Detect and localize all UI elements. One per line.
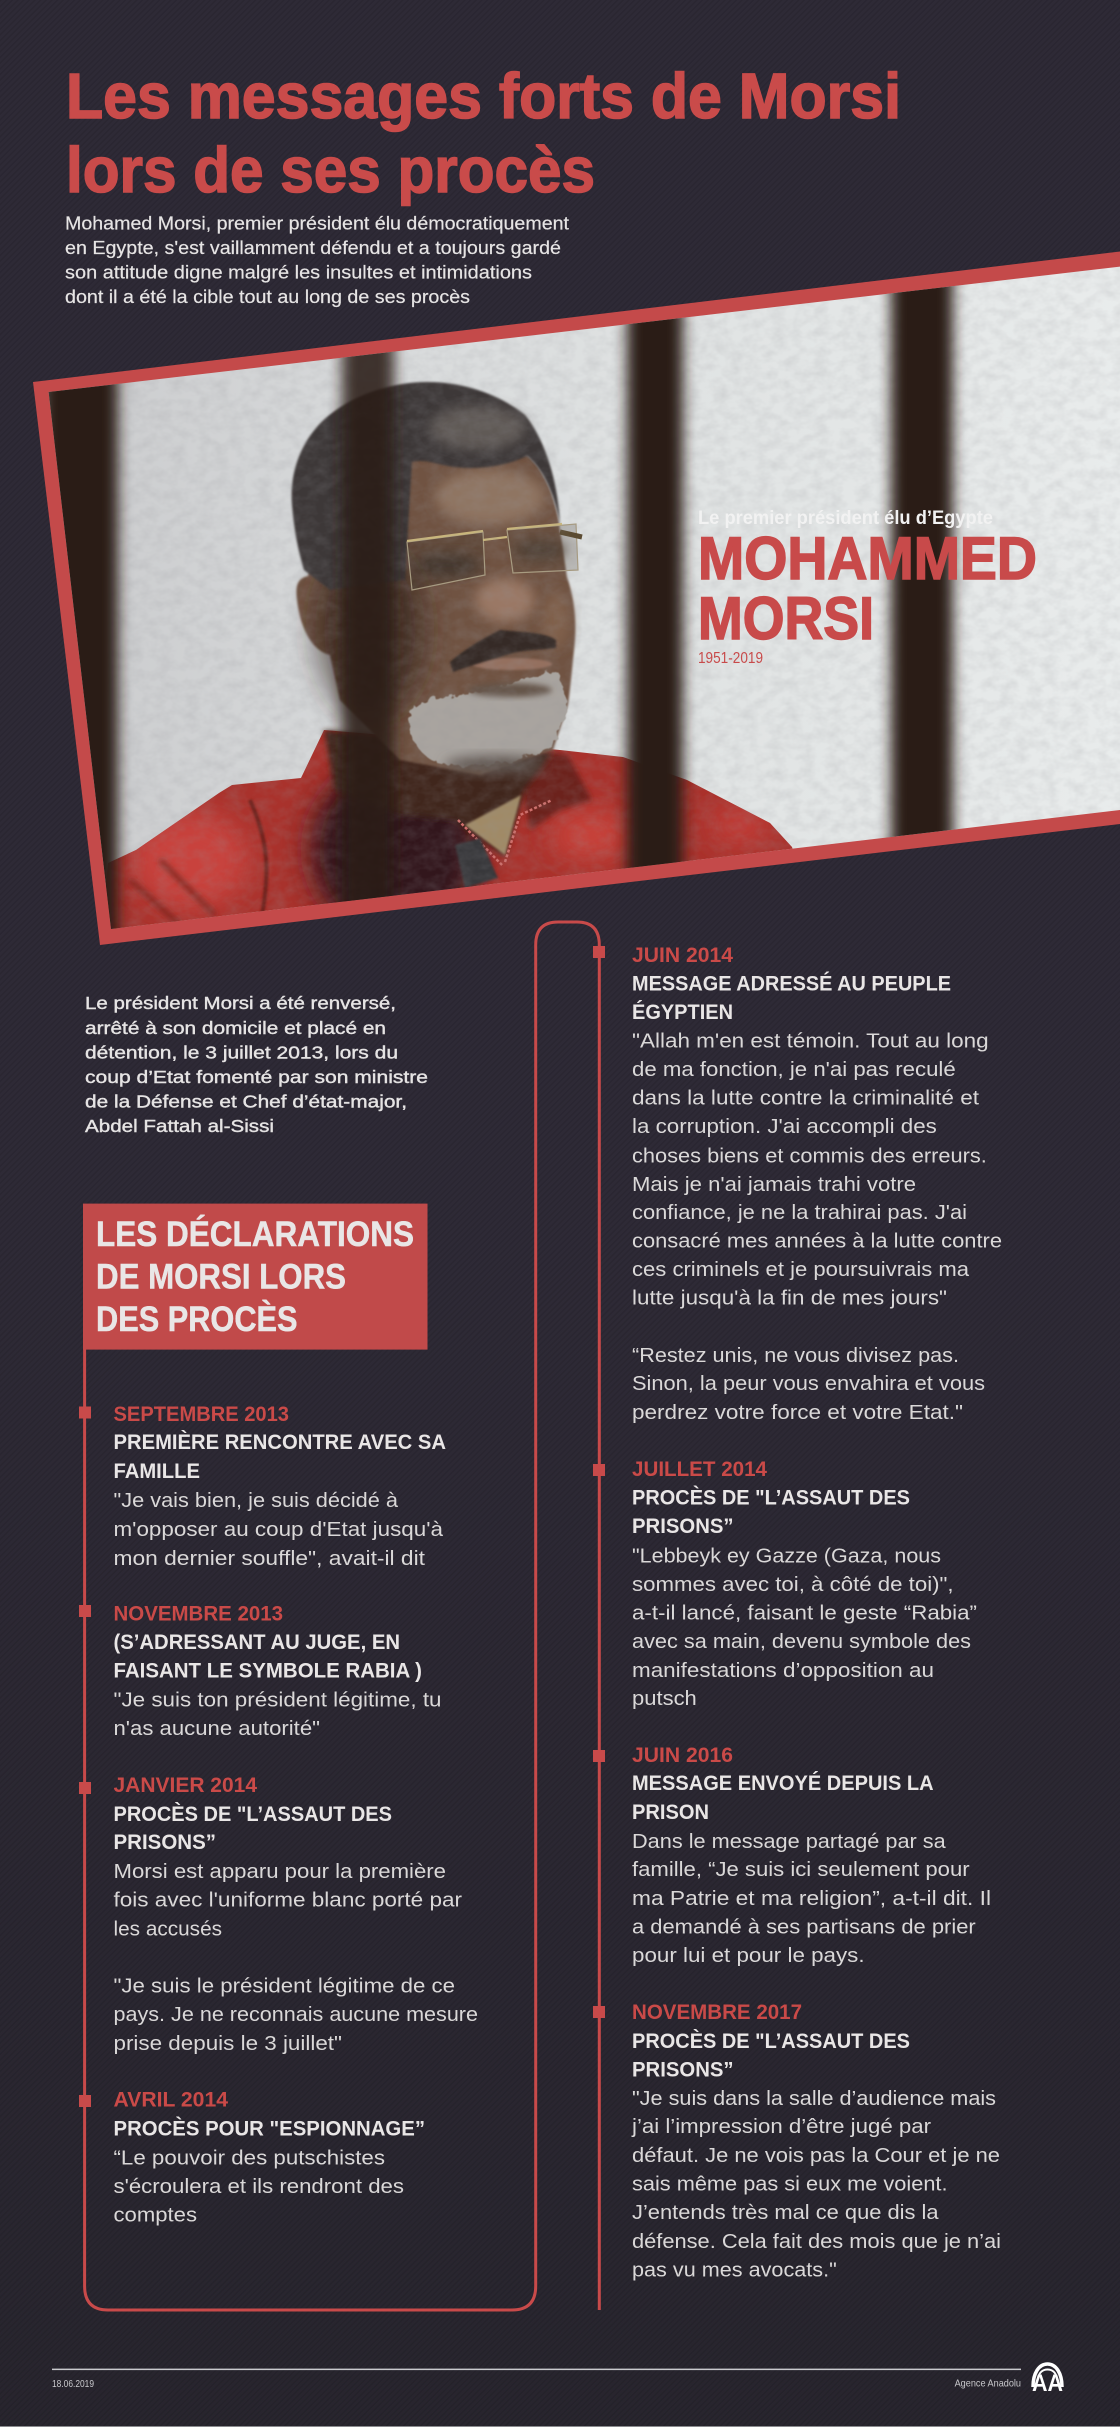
quotes: Sinon, la peur vous envahira et vous (632, 1372, 985, 1395)
face (296, 455, 575, 775)
heading: PREMIÈRE RENCONTRE AVEC SA (114, 1429, 446, 1454)
body: pays. Je ne reconnais aucune mesure (114, 2003, 478, 2026)
context paragraph: arrêté à son domicile et placé en (85, 1018, 386, 1038)
section heading box: DE MORSI LORS (96, 1257, 346, 1296)
intro text (65, 212, 569, 307)
quote: comptes (114, 2204, 197, 2226)
quote: "Lebbeyk ey Gazze (Gaza, nous (632, 1544, 941, 1568)
heading: PROCÈS DE "L’ASSAUT DES (632, 2028, 910, 2053)
quote (114, 2146, 404, 2226)
quote: putsch (632, 1687, 697, 1710)
date: JUILLET 2014 (632, 1457, 767, 1481)
context paragraph: détention, le 3 juillet 2013, lors du (85, 1042, 398, 1062)
marker (593, 2006, 605, 2018)
date: NOVEMBRE 2013 (114, 1602, 283, 1626)
heading: PROCÈS POUR "ESPIONNAGE” (114, 2116, 425, 2141)
heading: FAISANT LE SYMBOLE RABIA ) (114, 1659, 422, 1683)
hero caption: Le premier président élu d’Egypte (698, 508, 993, 529)
body: pour lui et pour le pays. (632, 1944, 865, 1967)
prison bars (42, 250, 953, 960)
context paragraph: Abdel Fattah al-Sissi (85, 1116, 274, 1136)
marker (593, 946, 605, 958)
quote: j’ai l’impression d’être jugé par (631, 2115, 931, 2138)
quotes (632, 1030, 1002, 1424)
heading (632, 2028, 910, 2082)
quote: avec sa main, devenu symbole des (632, 1630, 971, 1653)
heading: MESSAGE ENVOYÉ DEPUIS LA (632, 1770, 934, 1795)
quote: J’entends très mal ce que dis la (632, 2201, 939, 2224)
section heading box: LES DÉCLARATIONS (96, 1214, 414, 1254)
heading: PRISON (632, 1800, 709, 1824)
hero caption (698, 508, 1037, 667)
quote: “Le pouvoir des putschistes (114, 2146, 385, 2170)
quote: sommes avec toi, à côté de toi)", (632, 1573, 954, 1596)
shirt (106, 730, 792, 929)
quotes: choses biens et commis des erreurs. (632, 1144, 987, 1168)
quote (114, 1689, 442, 1740)
context paragraph: Le président Morsi a été renversé, (85, 993, 396, 1013)
quote: défense. Cela fait des mois que je n’ai (632, 2230, 1001, 2253)
marker (79, 1782, 91, 1794)
heading: FAMILLE (114, 1459, 200, 1483)
heading: PRISONS” (114, 1830, 216, 1854)
marker (79, 1406, 91, 1418)
section heading box (83, 1204, 428, 1350)
entry: novembre 2017 (593, 2000, 1001, 2282)
quote (632, 1544, 977, 1710)
hero caption: 1951-2019 (698, 650, 763, 667)
title: Les messages forts de Morsi (66, 60, 901, 132)
date: JANVIER 2014 (114, 1773, 257, 1797)
beard (410, 672, 567, 774)
body: "Je suis le président légitime de ce (114, 1975, 455, 1998)
neck (324, 730, 554, 857)
quote: n'as aucune autorité" (114, 1717, 320, 1740)
date: NOVEMBRE 2017 (632, 2000, 802, 2024)
body (114, 1860, 478, 2055)
title: lors de ses procès (66, 134, 595, 206)
marker (593, 1464, 605, 1476)
quotes: ces criminels et je poursuivrais ma (632, 1258, 970, 1281)
photo frame (33, 252, 1120, 945)
footer rule (52, 2369, 1021, 2370)
entry: novembre 2013 (79, 1602, 442, 1740)
marker (593, 1750, 605, 1762)
date: SEPTEMBRE 2013 (114, 1402, 289, 1426)
quotes: lutte jusqu'à la fin de mes jours" (632, 1287, 947, 1310)
heading: (S’ADRESSANT AU JUGE, EN (114, 1630, 400, 1654)
entry: juin 2016 (593, 1743, 991, 1967)
hair (292, 382, 560, 590)
context paragraph: de la Défense et Chef d’état-major, (85, 1092, 407, 1112)
entry: juillet 2014 (593, 1457, 977, 1710)
glasses (407, 524, 582, 590)
quotes: perdrez votre force et votre Etat." (632, 1401, 963, 1424)
heading: PRISONS” (632, 2058, 734, 2082)
heading: MESSAGE ADRESSÉ AU PEUPLE (632, 970, 951, 995)
quote: "Je suis ton président légitime, tu (114, 1689, 442, 1712)
body: famille, “Je suis ici seulement pour (632, 1858, 970, 1881)
quote: m'opposer au coup d'Etat jusqu'à (114, 1518, 444, 1541)
entry: septembre 2013 (79, 1402, 446, 1570)
body: Morsi est apparu pour la première (114, 1860, 446, 1883)
context paragraph (85, 993, 428, 1136)
heading (632, 1485, 910, 1538)
hero caption: MORSI (698, 585, 874, 652)
marker (79, 1605, 91, 1617)
quote: mon dernier souffle", avait-il dit (114, 1547, 425, 1570)
body (632, 1830, 991, 1967)
date: JUIN 2016 (632, 1743, 733, 1767)
quote: s'écroulera et ils rendront des (114, 2175, 404, 2198)
heading: PROCÈS DE "L’ASSAUT DES (114, 1801, 392, 1826)
quote: "Je suis dans la salle d’audience mais (632, 2087, 996, 2110)
date: JUIN 2014 (632, 943, 733, 967)
heading (632, 970, 951, 1024)
intro text: dont il a été la cible tout au long de ses procès (65, 286, 470, 307)
heading (632, 1770, 934, 1824)
quote: manifestations d’opposition au (632, 1659, 934, 1682)
heading: ÉGYPTIEN (632, 999, 733, 1024)
heading: PROCÈS DE "L’ASSAUT DES (632, 1485, 910, 1510)
photo grain (122, 267, 1120, 927)
quote (114, 1489, 444, 1570)
body: fois avec l'uniforme blanc porté par (114, 1889, 462, 1912)
intro text: son attitude digne malgré les insultes et intimidations (65, 262, 532, 283)
quote: pas vu mes avocats." (632, 2259, 837, 2282)
body: ma Patrie et ma religion”, a-t-il dit. Il (632, 1887, 991, 1910)
mustache and lips (450, 630, 556, 672)
intro text: en Egypte, s'est vaillamment défendu et a toujours gardé (65, 237, 561, 258)
quotes: confiance, je ne la trahirai pas. J'ai (632, 1201, 967, 1224)
quotes: de ma fonction, je n'ai pas reculé (632, 1058, 956, 1081)
quotes: "Allah m'en est témoin. Tout au long (632, 1030, 989, 1052)
intro text: Mohamed Morsi, premier président élu démocratiquement (65, 212, 569, 234)
body: Dans le message partagé par sa (632, 1830, 946, 1853)
heading (114, 1429, 446, 1483)
quotes: la corruption. J'ai accompli des (632, 1115, 937, 1138)
footer (52, 2364, 1063, 2397)
portrait photo illustration (30, 250, 1120, 960)
entry: avril 2014 (79, 2088, 425, 2226)
quotes: Mais je n'ai jamais trahi votre (632, 1173, 916, 1196)
entry: janvier 2014 (79, 1773, 478, 2055)
quote: sais même pas si eux me voient. (632, 2173, 948, 2196)
body: a demandé à ses partisans de prier (632, 1916, 976, 1939)
agency name: Agence Anadolu (955, 2378, 1021, 2390)
body: prise depuis le 3 juillet" (114, 2032, 342, 2055)
icon: Anadolu Agency logo: AA (1032, 2370, 1063, 2397)
quotes: “Restez unis, ne vous divisez pas. (632, 1344, 959, 1367)
body: les accusés (114, 1918, 222, 1941)
date: 18.06.2019 (52, 2378, 94, 2390)
heading (114, 1630, 422, 1683)
section heading box: DES PROCÈS (96, 1299, 298, 1339)
entry: juin 2014 (593, 943, 1002, 1424)
heading (114, 1801, 392, 1854)
context paragraph: coup d’Etat fomenté par son ministre (85, 1067, 428, 1087)
quote: a-t-il lancé, faisant le geste “Rabia” (632, 1602, 977, 1625)
marker (79, 2095, 91, 2107)
hero caption: MOHAMMED (698, 525, 1037, 592)
heading: PRISONS” (632, 1514, 734, 1538)
quote: "Je vais bien, je suis décidé à (114, 1489, 399, 1512)
quote: défaut. Je ne vois pas la Cour et je ne (632, 2144, 1000, 2167)
title (66, 60, 901, 206)
photo panel: Morsi behind bars (30, 250, 1120, 960)
quotes: consacré mes années à la lutte contre (632, 1230, 1002, 1252)
quote (631, 2087, 1001, 2282)
date: AVRIL 2014 (114, 2088, 228, 2112)
quotes: dans la lutte contre la criminalité et (632, 1087, 979, 1110)
timeline line (85, 922, 599, 2310)
